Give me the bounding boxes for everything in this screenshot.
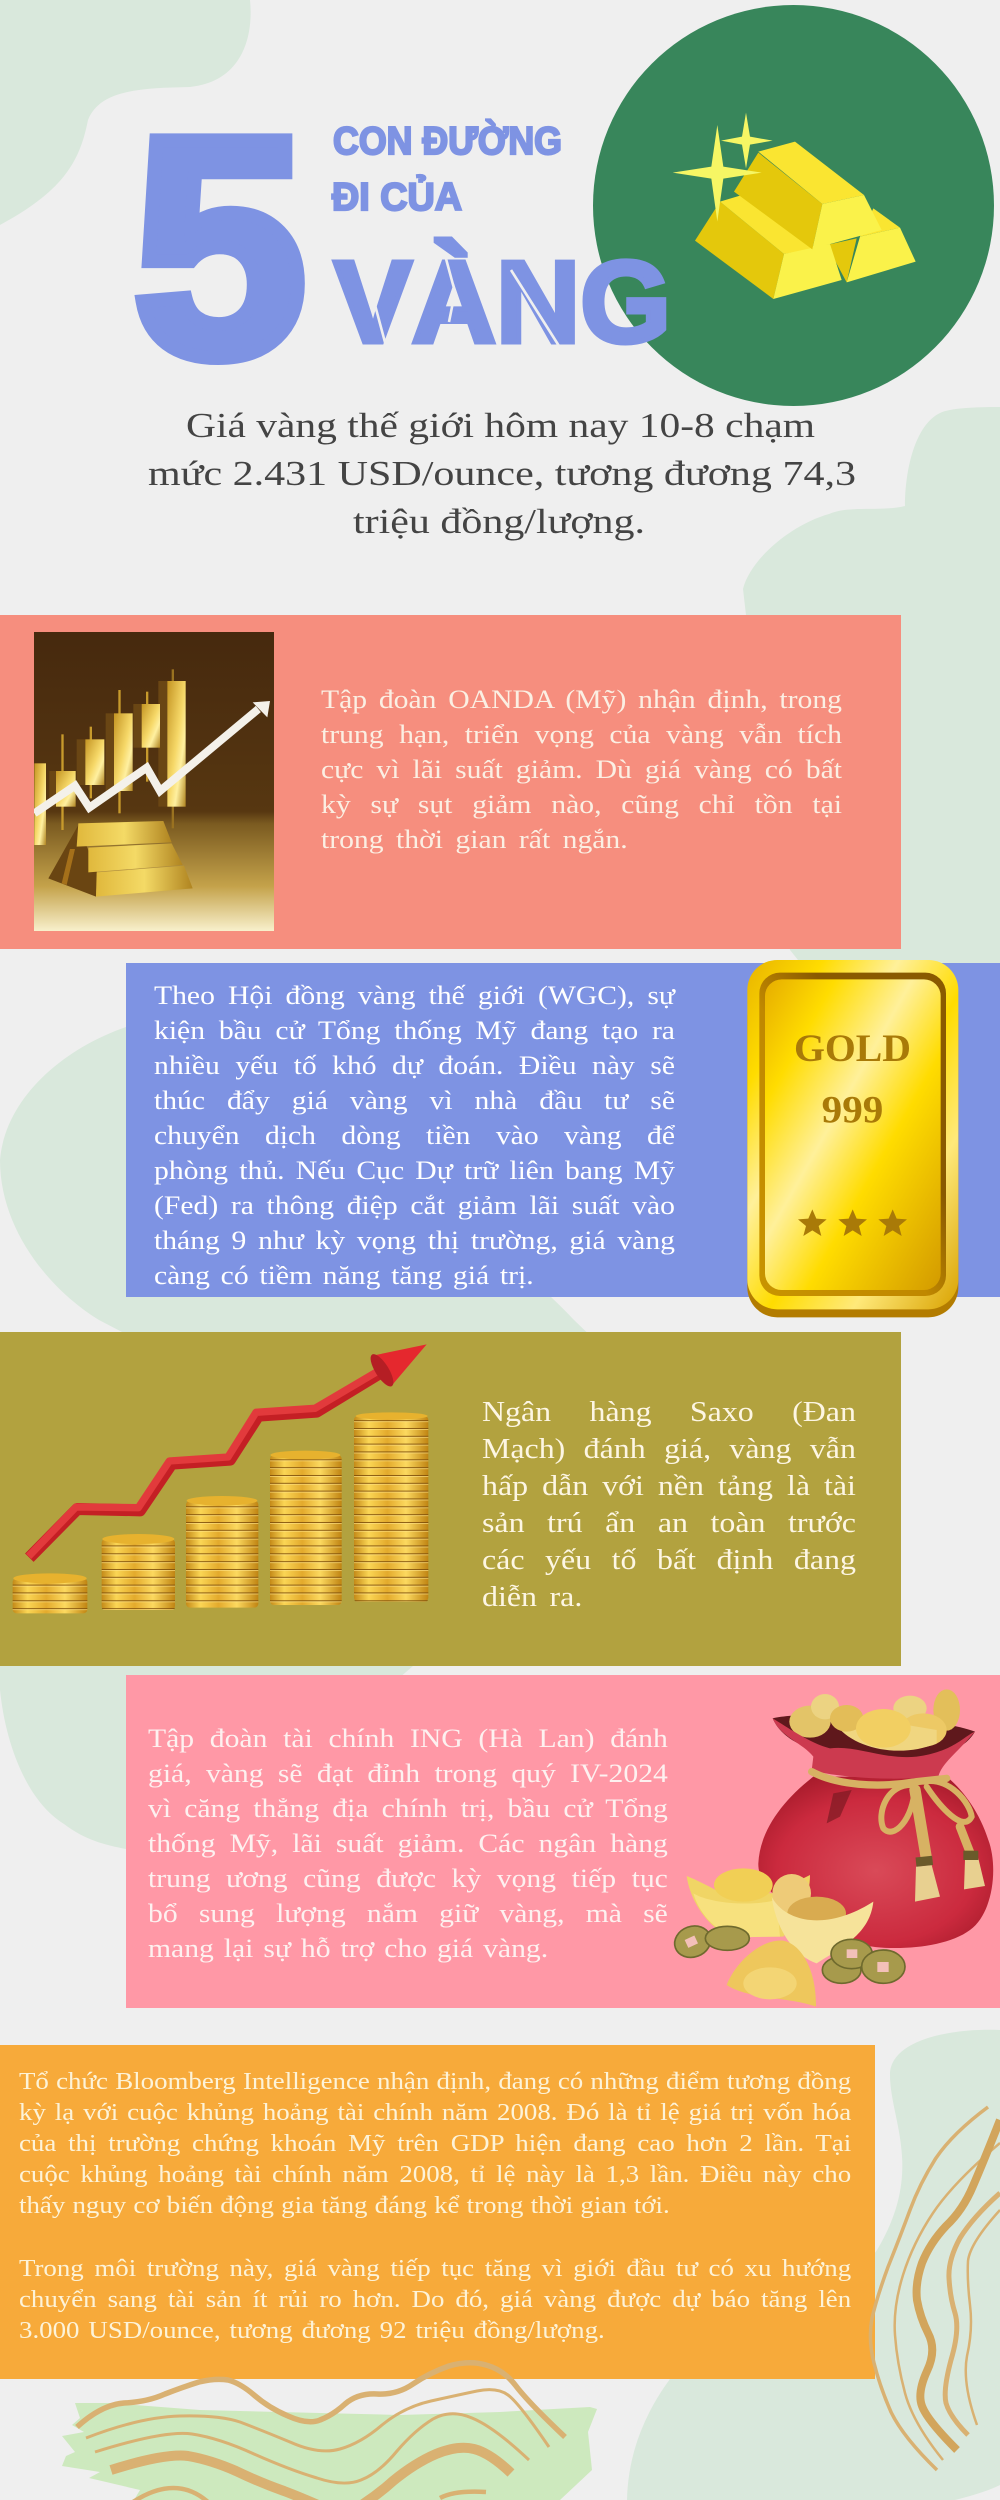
text: WGC: kiện bầu cử Tổng thống Mỹ đang tạo ra <box>154 1016 675 1045</box>
subtitle: triệu đồng/lượng. <box>353 502 645 541</box>
text: Bloomberg paragraph 2: chuyển sang tài sản ít rủi ro hơn. Do đó, giá vàng được dự báo tăng lên <box>19 2287 851 2313</box>
text: OANDA: cực vì lãi suất giảm. Dù giá vàng có bất <box>321 755 842 784</box>
text: OANDA: kỳ sự sụt giảm nào, cũng chỉ tồn tại <box>321 790 842 819</box>
bag body <box>758 1777 993 1948</box>
panel: ING <box>126 1675 1000 2008</box>
panel: Bloomberg Intelligence <box>0 2045 875 2379</box>
text: WGC: (Fed) ra thông điệp cắt giảm lãi suất vào <box>154 1191 675 1220</box>
text: WGC: thúc đẩy giá vàng vì nhà đầu tư sẽ <box>154 1086 675 1115</box>
text: Bloomberg paragraph 1: của thị trường chứng khoán Mỹ trên GDP hiện đang cao hơn 2 lần. Tại <box>19 2131 851 2157</box>
text: WGC: nhiều yếu tố khó dự đoán. Điều này sẽ <box>154 1051 675 1080</box>
text: WGC: phòng thủ. Nếu Cục Dự trữ liên bang Mỹ <box>154 1156 675 1185</box>
title line: đi của: ĐI CỦA <box>332 175 462 219</box>
text: Saxo: hấp dẫn với nền tảng là tài <box>482 1471 856 1502</box>
label: GOLD: GOLD <box>794 1026 911 1070</box>
text: Saxo: diễn ra. <box>482 1582 582 1613</box>
title line: con đường: CON ĐƯỜNG <box>333 119 562 163</box>
label: 999: 999 <box>822 1088 883 1132</box>
text: ING: mang lại sự hỗ trợ cho giá vàng. <box>148 1934 548 1963</box>
text: Bloomberg paragraph 1: cuộc khủng hoảng tài chính năm 2008, tỉ lệ này là 1,3 lần. Điều này cho <box>19 2162 851 2188</box>
text: ING: giá, vàng sẽ đạt đỉnh trong quý IV-2024 <box>148 1759 668 1788</box>
text: WGC <box>154 981 676 1290</box>
text: OANDA: trung hạn, triển vọng của vàng vẫn tích <box>321 720 842 749</box>
decoration: gold waves right <box>868 2106 1000 2472</box>
text: Saxo: Ngân hàng Saxo (Đan <box>482 1397 856 1428</box>
text: WGC: Theo Hội đồng vàng thế giới (WGC), sự <box>154 981 675 1010</box>
green circle <box>593 5 994 406</box>
bag frill <box>773 1718 975 1779</box>
text: Saxo: Mạch) đánh giá, vàng vẫn <box>482 1434 856 1465</box>
panel: WGC <box>126 963 1000 1297</box>
text: WGC: tháng 9 như kỳ vọng thị trường, giá vàng <box>154 1226 675 1255</box>
stars <box>798 1209 907 1236</box>
title <box>133 110 671 380</box>
gold contents <box>789 1689 960 1751</box>
panel: OANDA <box>0 615 901 949</box>
subtitle: mức 2.431 USD/ounce, tương đương 74,3 <box>148 454 856 493</box>
text: WGC: càng có tiềm năng tăng giá trị. <box>154 1261 534 1290</box>
subtitle: Giá vàng thế giới hôm nay 10-8 chạm <box>186 406 815 445</box>
icon: gold bars with sparkles <box>672 112 916 299</box>
illustration: coin stacks with red arrow <box>12 1344 428 1614</box>
text: ING: trung ương cũng được kỳ vọng tiếp tục <box>148 1864 668 1893</box>
bag mouth <box>773 1715 975 1760</box>
text: Saxo: sản trú ẩn an toàn trước <box>482 1508 856 1539</box>
panel: Saxo <box>0 1332 901 1666</box>
text: Saxo <box>482 1397 856 1613</box>
text: Bloomberg paragraph 2: Trong môi trường này, giá vàng tiếp tục tăng vì giới đầu tư có xu hướng <box>19 2256 851 2282</box>
subtitle <box>148 406 856 541</box>
text: Bloomberg paragraph 1 <box>19 2069 851 2219</box>
coins <box>670 1921 905 1983</box>
text: Bloomberg paragraph 1: thấy nguy cơ biến động gia tăng đáng kể trong thời gian tới. <box>19 2193 670 2219</box>
text: ING: vì căng thẳng địa chính trị, bầu cử Tổng <box>148 1794 668 1823</box>
ingot left <box>687 1875 810 1937</box>
text: Bloomberg paragraph 1: Tổ chức Bloomberg Intelligence nhận định, đang có những điểm tương đồng <box>19 2069 851 2095</box>
ingot right <box>772 1874 811 1913</box>
text: Bloomberg paragraph 1: kỳ lạ với cuộc khủng hoảng tài chính năm 2008. Đó là tỉ lệ giá trị vốn hóa <box>19 2100 851 2126</box>
icon: gold bar 999 <box>747 960 958 1318</box>
text: ING: bổ sung lượng nắm giữ vàng, mà sẽ <box>148 1899 668 1928</box>
text: Saxo: các yếu tố bất định đang <box>482 1545 856 1576</box>
text: OANDA: Tập đoàn OANDA (Mỹ) nhận định, trong <box>321 685 842 714</box>
rope and tassels <box>812 1772 972 1860</box>
text: ING <box>148 1724 668 1963</box>
title line: vàng: VÀNG <box>334 237 671 367</box>
ingot front <box>727 1940 816 2007</box>
illustration: red bag of gold with ingots and coins <box>674 1689 994 2006</box>
text: OANDA: trong thời gian rất ngắn. <box>321 825 628 854</box>
text: ING: Tập đoàn tài chính ING (Hà Lan) đánh <box>148 1724 668 1753</box>
text: Bloomberg paragraph 2: 3.000 USD/ounce, tương đương 92 triệu đồng/lượng. <box>19 2318 605 2344</box>
text: WGC: chuyển dịch dòng tiền vào vàng để <box>154 1121 675 1150</box>
text: Bloomberg paragraph 2 <box>19 2256 851 2344</box>
text: OANDA <box>321 685 842 854</box>
image: gold candlestick chart <box>34 632 274 931</box>
decoration: gold waves bottom <box>75 2360 567 2500</box>
text: ING: thống Mỹ, lãi suất giảm. Các ngân hàng <box>148 1829 668 1858</box>
